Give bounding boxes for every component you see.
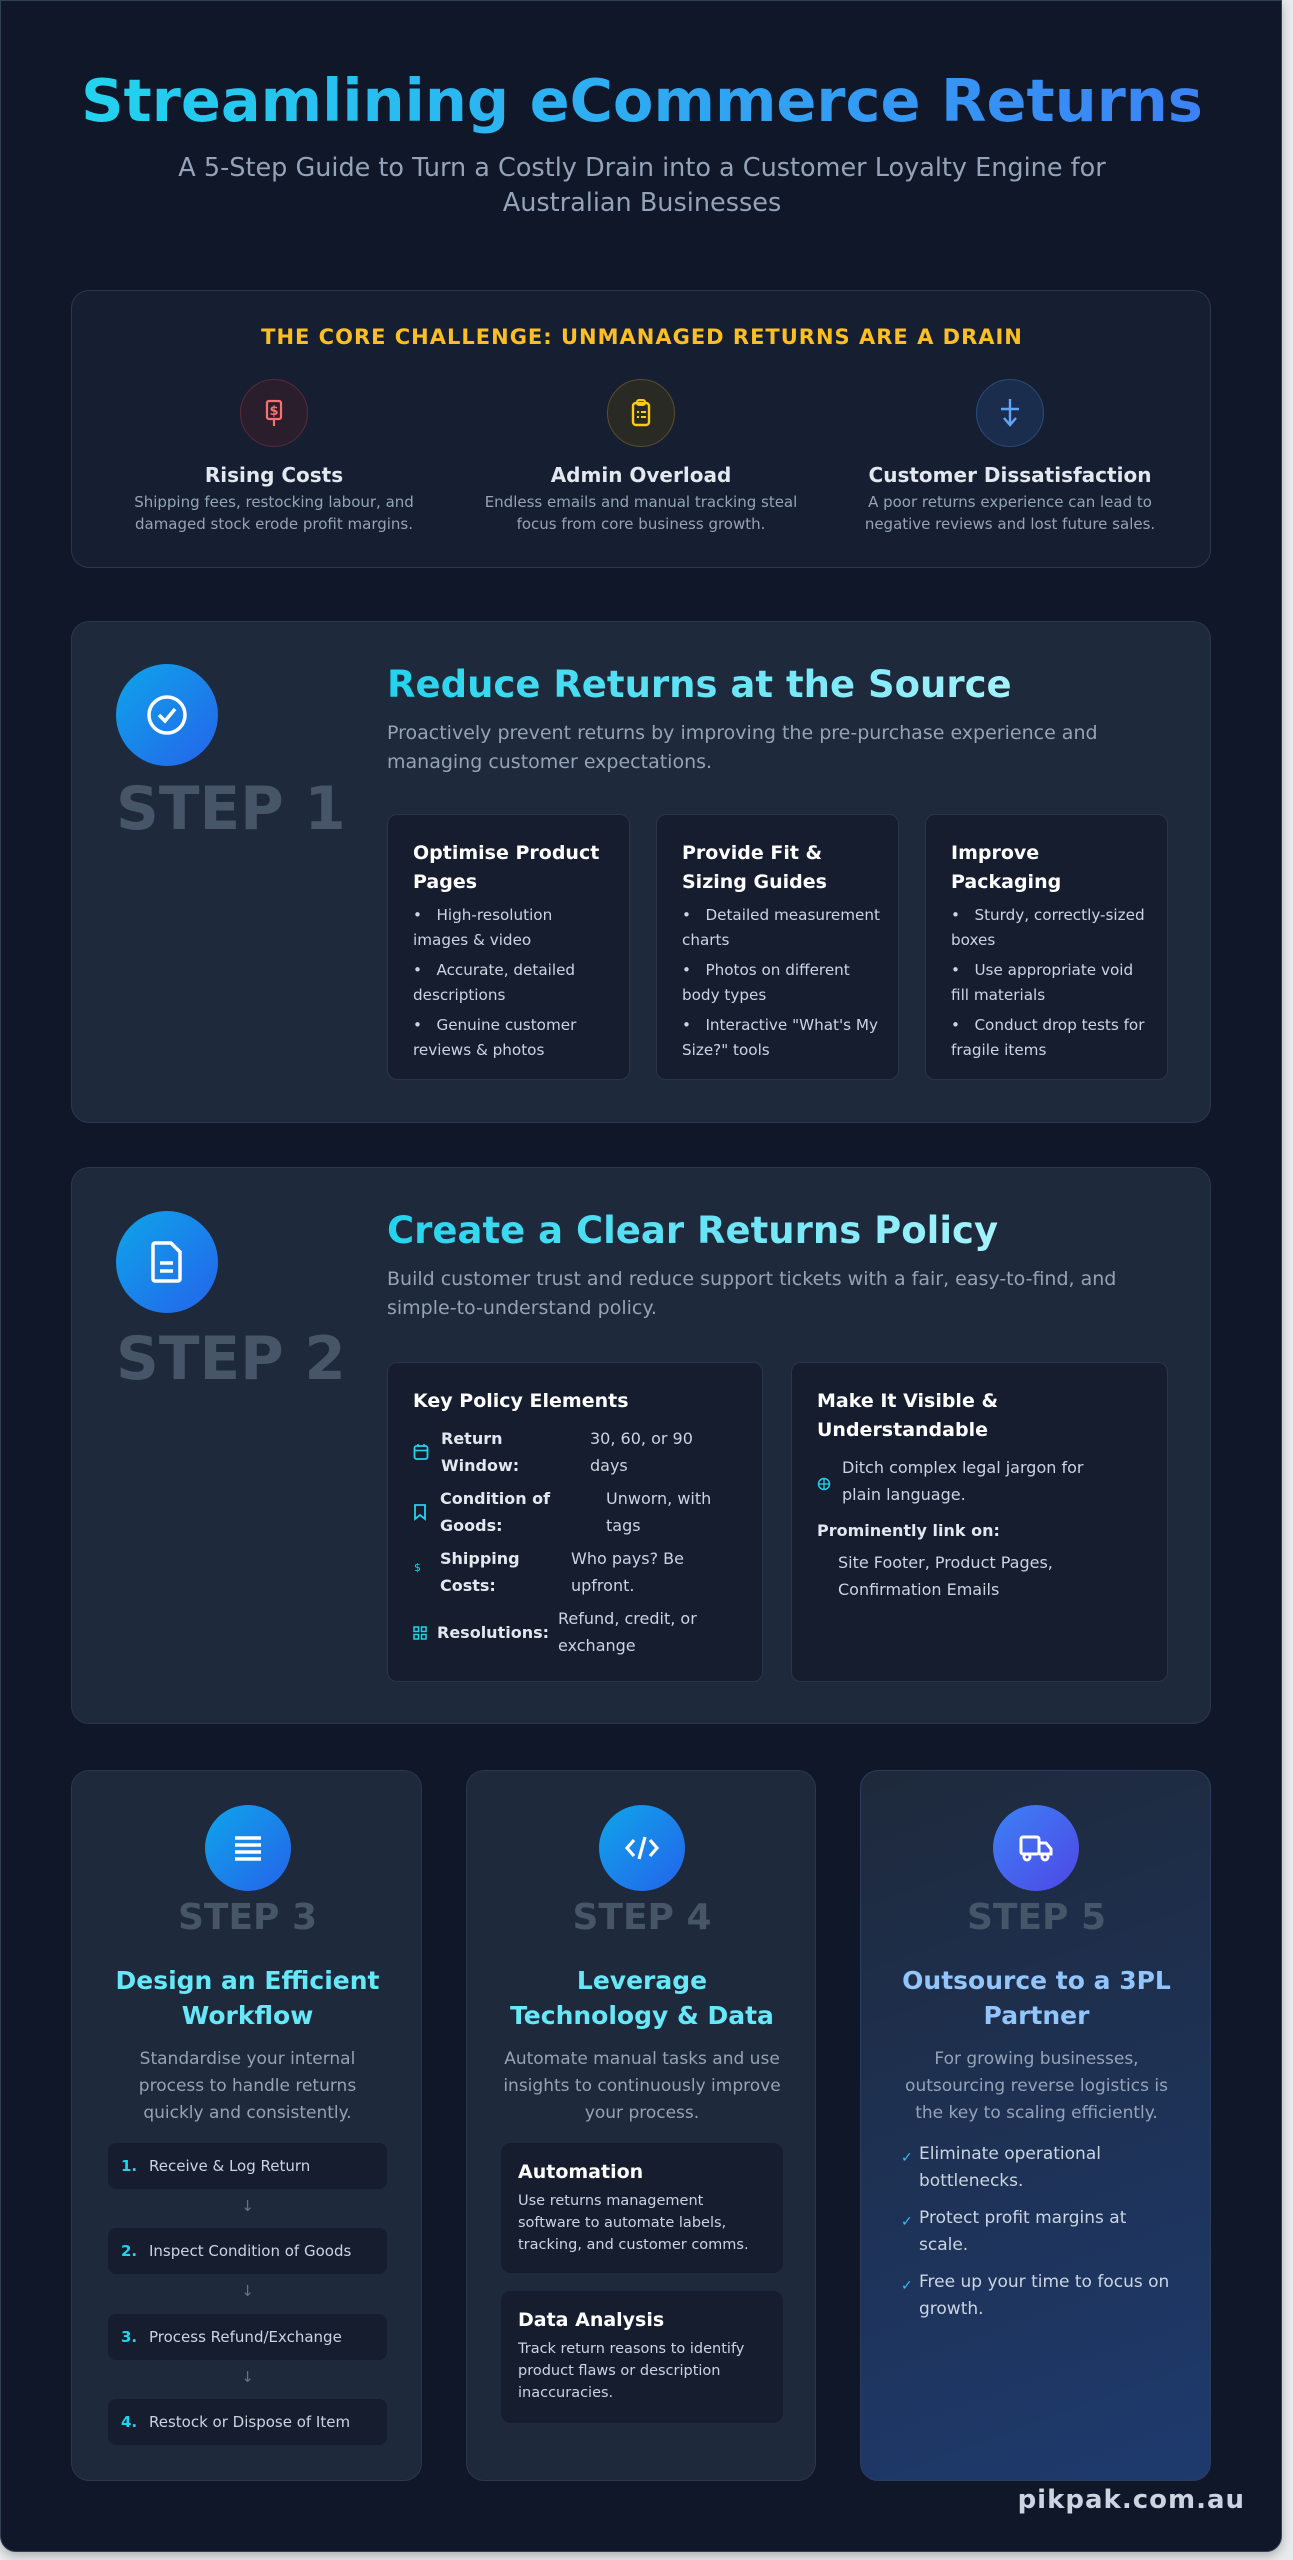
card: packaging: • Use appropriate void fill materials bbox=[951, 961, 1133, 1004]
step 3 heading: Workflow bbox=[182, 2001, 313, 2030]
step 4 heading: Technology & Data bbox=[510, 2001, 774, 2030]
row: return window: 30, 60, or 90 bbox=[590, 1429, 693, 1448]
row: condition of goods: Goods: bbox=[440, 1516, 502, 1535]
item: customer dissatisfaction: Customer Dissatisfaction bbox=[869, 463, 1151, 487]
text: plain language bbox=[842, 1458, 1084, 1504]
row: shipping costs: Shipping bbox=[440, 1549, 520, 1568]
step 1 description: Proactively prevent returns by improving the pre-purchase experience and managing customer expectations. bbox=[387, 722, 1098, 773]
step 4 heading: Leverage bbox=[577, 1966, 707, 1995]
workflow list: ↓ bbox=[241, 2197, 254, 2215]
icon: document bbox=[116, 1211, 218, 1313]
card: visible & understandable bbox=[791, 1362, 1168, 1682]
text: plain language: plain language. bbox=[842, 1485, 966, 1504]
card: visible & understandable: Confirmation Emails bbox=[838, 1580, 999, 1599]
workflow list: Process Refund/Exchange bbox=[149, 2328, 342, 2346]
workflow list: ↓ bbox=[241, 2368, 254, 2386]
workflow list: 2. bbox=[121, 2242, 137, 2260]
row: shipping costs: upfront. bbox=[571, 1576, 634, 1595]
subtitle: A 5-Step Guide to Turn a Costly Drain into a Customer Loyalty Engine for Australian Businesses bbox=[178, 153, 1106, 218]
card: key policy elements: Key Policy Elements bbox=[413, 1390, 629, 1412]
item: customer dissatisfaction bbox=[865, 379, 1155, 533]
step 5 heading: Outsource to a 3PL bbox=[902, 1966, 1171, 1995]
step 1 heading: Reduce Returns at the Source bbox=[387, 663, 1012, 706]
row: return window: Return bbox=[441, 1429, 502, 1448]
workflow list: ↓ bbox=[241, 2282, 254, 2300]
card: visible & understandable: Make It Visible & bbox=[817, 1390, 998, 1412]
step 5 description: For growing businesses, outsourcing reverse logistics is the key to scaling efficiently. bbox=[905, 2049, 1168, 2123]
panel: step 1 bbox=[71, 621, 1211, 1123]
row: return window: Window: bbox=[441, 1456, 519, 1475]
row: resolutions: Resolutions: bbox=[437, 1623, 549, 1642]
icon: dollar: $ bbox=[269, 404, 279, 419]
step 5 heading: Partner bbox=[984, 2001, 1089, 2030]
card: product pages: • Accurate, detailed descriptions bbox=[413, 961, 575, 1004]
card: sizing guides: Sizing Guides bbox=[682, 871, 827, 893]
title: Streamlining eCommerce Returns bbox=[81, 66, 1203, 135]
item: admin overload: Endless emails and manual tracking steal focus from core business growth. bbox=[485, 493, 797, 533]
row: shipping costs: $ bbox=[414, 1561, 421, 1574]
box: automation: Automation bbox=[518, 2161, 643, 2183]
card: packaging: • Conduct drop tests for fragile items bbox=[951, 1016, 1144, 1059]
icon: clipboard bbox=[607, 379, 675, 447]
checklist: Free up your time to focus on growth. bbox=[919, 2272, 1169, 2319]
challenge heading: THE CORE CHALLENGE: UNMANAGED RETURNS ARE A DRAIN bbox=[261, 325, 1023, 349]
row: return window bbox=[414, 1429, 693, 1475]
item: rising costs bbox=[134, 379, 414, 533]
item: rising costs: Rising Costs bbox=[205, 463, 343, 487]
card: packaging bbox=[925, 814, 1168, 1080]
item: rising costs: Shipping fees, restocking labour, and damaged stock erode profit margins. bbox=[134, 493, 414, 533]
card: product pages: • Genuine customer reviews & photos bbox=[413, 1016, 576, 1059]
row: return window: days bbox=[590, 1456, 628, 1475]
card: packaging: Packaging bbox=[951, 871, 1061, 893]
step 4 heading bbox=[510, 1966, 774, 2030]
step 5 heading bbox=[902, 1966, 1171, 2030]
step 2 heading: Create a Clear Returns Policy bbox=[387, 1209, 998, 1252]
workflow list: Inspect Condition of Goods bbox=[149, 2242, 351, 2260]
text: plain language: Ditch complex legal jargon for bbox=[842, 1458, 1083, 1477]
box: data analysis: Data Analysis bbox=[518, 2309, 664, 2331]
step number: STEP 3 bbox=[178, 1897, 317, 1938]
row: resolutions: exchange bbox=[558, 1636, 636, 1655]
panel: core challenge bbox=[71, 290, 1211, 568]
card: visible & understandable: Understandable bbox=[817, 1419, 988, 1441]
step number: STEP 1 bbox=[116, 775, 346, 844]
text: prominently link: Prominently link on: bbox=[817, 1521, 1000, 1540]
box: automation bbox=[501, 2143, 783, 2273]
card: key policy elements bbox=[387, 1362, 763, 1682]
panel: step 2 bbox=[71, 1167, 1211, 1724]
icon: down arrow bbox=[976, 379, 1044, 447]
card: packaging: Improve bbox=[951, 842, 1039, 864]
item: customer dissatisfaction: A poor returns experience can lead to negative reviews and lost future sales. bbox=[865, 493, 1155, 533]
card: sizing guides: Provide Fit & bbox=[682, 842, 822, 864]
card: product pages: Optimise Product Pages bbox=[413, 842, 599, 893]
card: product pages bbox=[387, 814, 630, 1080]
footer brand: pikpak.com.au bbox=[1018, 2485, 1245, 2515]
card: packaging: • Sturdy, correctly-sized boxes bbox=[951, 906, 1145, 949]
card: product pages: • High-resolution images & video bbox=[413, 906, 552, 949]
icon: check circle bbox=[116, 664, 218, 766]
icon: truck bbox=[993, 1805, 1079, 1891]
checklist: Eliminate operational bottlenecks. bbox=[919, 2144, 1101, 2191]
box: data analysis: Track return reasons to identify product flaws or description inaccuracies. bbox=[518, 2341, 744, 2401]
workflow list: 1. bbox=[121, 2157, 137, 2175]
card: sizing guides: • Photos on different body types bbox=[682, 961, 850, 1004]
card: sizing guides: • Interactive "What's My Size?" tools bbox=[682, 1016, 878, 1059]
step 3 description: Standardise your internal process to handle returns quickly and consistently. bbox=[139, 2049, 356, 2123]
box: data analysis bbox=[501, 2291, 783, 2423]
panel: step 3 bbox=[71, 1770, 422, 2481]
workflow list: Restock or Dispose of Item bbox=[149, 2413, 350, 2431]
card: sizing guides bbox=[656, 814, 899, 1080]
step 3 heading: Design an Efficient bbox=[116, 1966, 379, 1995]
row: shipping costs: Costs: bbox=[440, 1576, 496, 1595]
card: visible & understandable: Site Footer, Product Pages, bbox=[838, 1553, 1053, 1572]
workflow list: Receive & Log Return bbox=[149, 2157, 310, 2175]
step number: STEP 5 bbox=[967, 1897, 1106, 1938]
icon: dollar bbox=[240, 379, 308, 447]
step number: STEP 2 bbox=[116, 1325, 346, 1394]
row: condition of goods: Unworn, with bbox=[606, 1489, 711, 1508]
icon: globe bbox=[818, 1478, 830, 1490]
panel: step 5 bbox=[860, 1770, 1211, 2481]
checklist: Protect profit margins at scale. bbox=[919, 2208, 1126, 2255]
checklist: ✓ bbox=[901, 2214, 913, 2230]
row: resolutions bbox=[413, 1609, 697, 1655]
card: sizing guides: • Detailed measurement charts bbox=[682, 906, 880, 949]
workflow list: 4. bbox=[121, 2413, 137, 2431]
box: automation: Use returns management software to automate labels, tracking, and customer comms. bbox=[518, 2193, 749, 2253]
panel: step 4 bbox=[466, 1770, 816, 2481]
checklist bbox=[901, 2144, 1169, 2319]
step 2 description: Build customer trust and reduce support tickets with a fair, easy-to-find, and simple-to-understand policy. bbox=[387, 1268, 1116, 1319]
icon: list bbox=[205, 1805, 291, 1891]
checklist: ✓ bbox=[901, 2278, 913, 2294]
workflow list bbox=[108, 2143, 387, 2445]
row: condition of goods: Condition of bbox=[440, 1489, 550, 1508]
workflow list: 3. bbox=[121, 2328, 137, 2346]
item: admin overload bbox=[485, 379, 797, 533]
row: shipping costs bbox=[414, 1549, 684, 1595]
row: shipping costs: Who pays? Be bbox=[571, 1549, 684, 1568]
item: admin overload: Admin Overload bbox=[551, 463, 731, 487]
row: resolutions: Refund, credit, or bbox=[558, 1609, 697, 1628]
step 4 description: Automate manual tasks and use insights to continuously improve your process. bbox=[503, 2049, 781, 2123]
step number: STEP 4 bbox=[572, 1897, 712, 1938]
row: condition of goods: tags bbox=[606, 1516, 641, 1535]
icon: code bbox=[599, 1805, 685, 1891]
step 3 heading bbox=[116, 1966, 379, 2030]
checklist: ✓ bbox=[901, 2150, 913, 2166]
row: condition of goods bbox=[414, 1489, 711, 1535]
